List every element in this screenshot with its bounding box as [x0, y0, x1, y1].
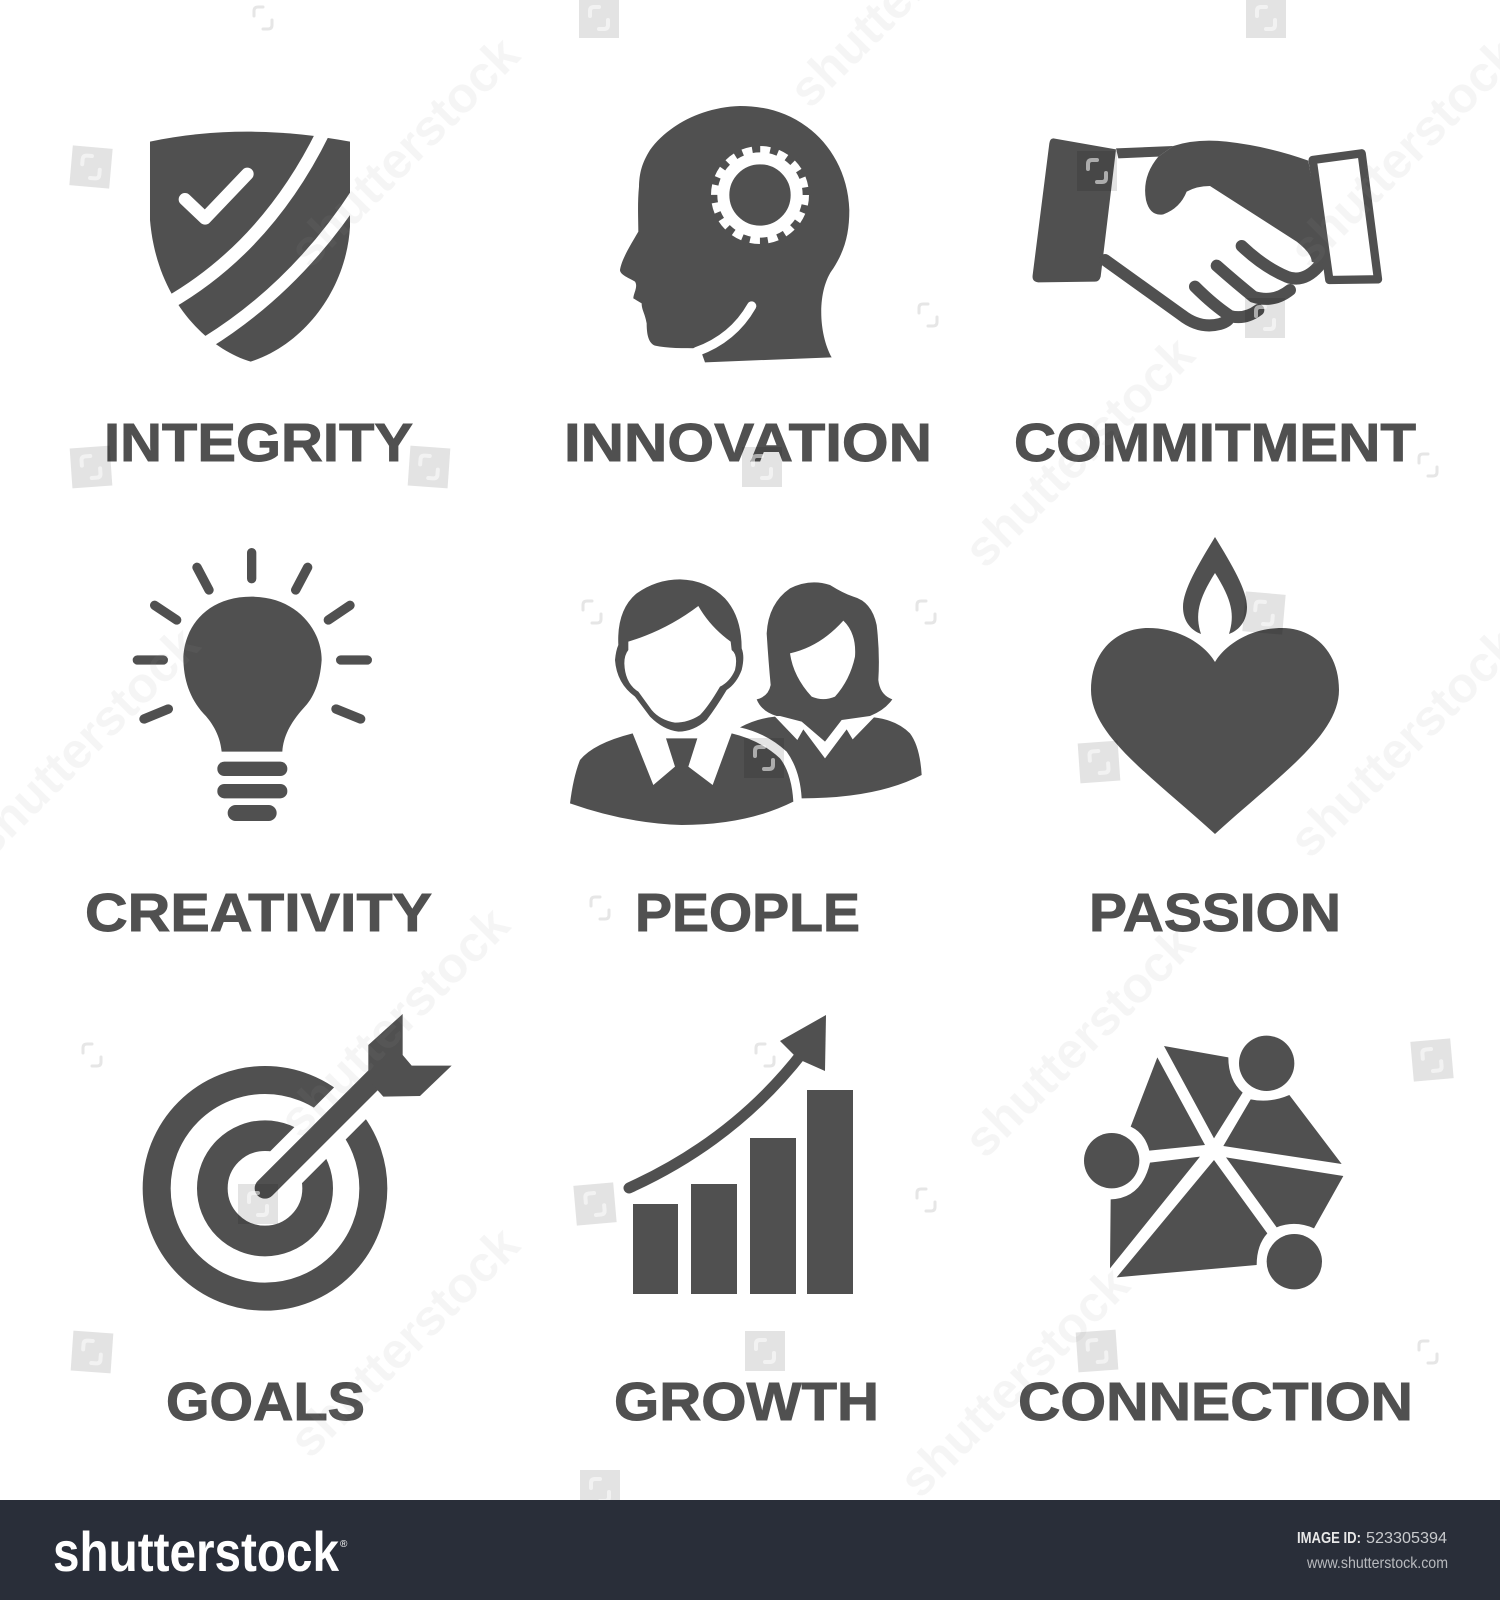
diagonal watermark text: shutterstock	[953, 916, 1205, 1168]
diagonal watermark text: shutterstock	[953, 326, 1205, 578]
label: people: PEOPLE	[635, 883, 860, 943]
icon: growth bar chart with arrow	[629, 1015, 853, 1294]
label: commitment: COMMITMENT	[1014, 413, 1416, 473]
diagonal watermark text: shutterstock	[268, 896, 520, 1148]
label: passion: PASSION	[1089, 883, 1341, 943]
label: innovation: INNOVATION	[564, 413, 932, 473]
icon: man and woman	[570, 579, 922, 825]
label: integrity: INTEGRITY	[104, 413, 413, 473]
icon: shield with check mark	[150, 132, 358, 362]
icon: head with gear	[620, 106, 849, 362]
footer logo: shutterstock	[53, 1520, 340, 1583]
label: creativity: CREATIVITY	[85, 883, 432, 943]
diagonal watermark text: shutterstock	[278, 26, 530, 278]
icon: connection network	[1084, 1036, 1343, 1289]
diagonal watermark text: shutterstock	[888, 1256, 1140, 1508]
label: goals: GOALS	[166, 1372, 365, 1432]
icon: heart with flame	[1091, 537, 1339, 834]
label: connection: CONNECTION	[1018, 1372, 1413, 1432]
icon: handshake	[1033, 138, 1378, 325]
footer bar	[0, 1500, 1500, 1600]
website: www.shutterstock.com	[1306, 1555, 1448, 1572]
image id number: 523305394	[1366, 1530, 1447, 1547]
icon: target with arrow	[157, 1014, 452, 1297]
diagonal watermark text: shutterstock	[278, 1216, 530, 1468]
icon: light bulb	[137, 553, 367, 821]
registered mark: ®	[340, 1539, 348, 1550]
image id label: IMAGE ID:	[1297, 1530, 1361, 1547]
label: growth: GROWTH	[614, 1372, 879, 1432]
